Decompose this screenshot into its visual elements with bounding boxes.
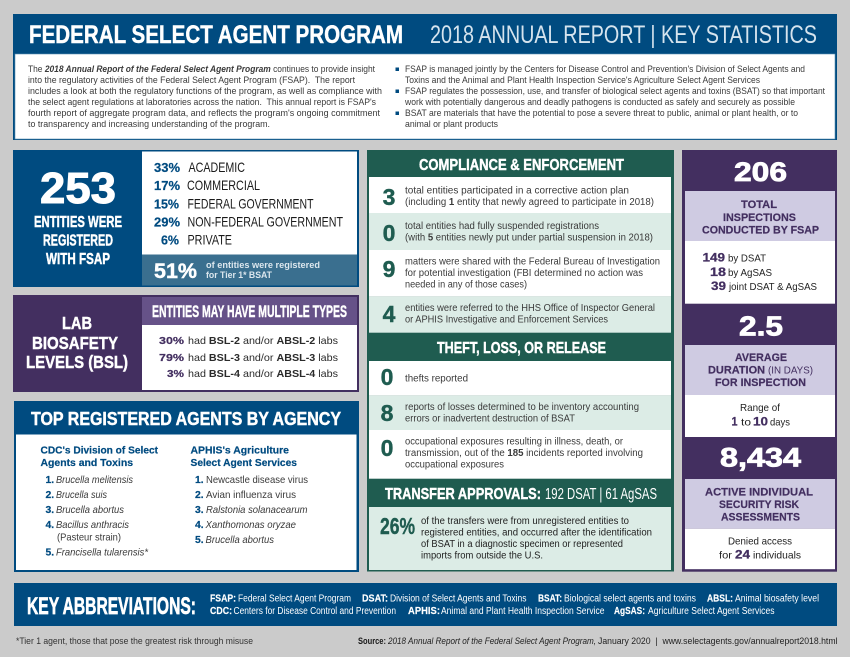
- tier 1 statistic: [154, 260, 320, 283]
- CDC list: CDC's Division of Select: [40, 446, 159, 456]
- assessments label: ASSESSMENTS: [721, 512, 800, 524]
- compliance row: suspended registrations: total entities had fully suspended registrations: [405, 221, 599, 232]
- inspections label: CONDUCTED BY FSAP: [702, 224, 819, 236]
- entity type breakdown: 6%: [161, 234, 179, 248]
- APHIS list: 1.: [195, 475, 204, 486]
- duration range: Range of: [740, 402, 780, 414]
- inspections label: TOTAL: [741, 199, 777, 211]
- bullet list: FSAP regulates the possession, use, and transfer of biological select agents and toxins (BSAT) so that important: [405, 86, 825, 96]
- abbreviations second row: CDC:: [210, 606, 232, 617]
- CDC list: 5.: [46, 548, 54, 558]
- panel: registered entities: [13, 150, 359, 287]
- abbreviations second row: Centers for Disease Control and Prevention: [234, 606, 396, 617]
- theft row: thefts: [369, 361, 671, 396]
- abbreviations first row: DSAT:: [362, 594, 388, 604]
- abbreviations first row: Biological select agents and toxins: [564, 594, 696, 604]
- abbreviations second row: Animal and Plant Health Inspection Service: [441, 606, 605, 617]
- duration range: 1: [732, 416, 738, 428]
- CDC list: Brucella melitensis: [56, 475, 133, 486]
- panel: inspections: [682, 150, 837, 572]
- tier 1 statistic: 51%: [154, 260, 197, 283]
- abbreviations heading: KEY ABBREVIATIONS:: [27, 593, 196, 620]
- theft row: losses: [369, 396, 671, 430]
- source line: [358, 636, 838, 647]
- compliance row: FBI matters: 9: [383, 256, 395, 282]
- biosafety heading: BIOSAFETY: [32, 333, 118, 353]
- CDC list: Brucella abortus: [56, 505, 124, 516]
- entities caption: [34, 214, 122, 268]
- denied access: for: [719, 550, 733, 562]
- entities caption: REGISTERED: [43, 232, 113, 250]
- APHIS list: Avian influenza virus: [206, 490, 296, 501]
- transfer approvals heading: TRANSFER APPROVALS:: [385, 486, 541, 503]
- compliance row: referrals: or APHIS Investigative and Enforcement Services: [405, 314, 608, 326]
- APHIS list: [190, 446, 308, 546]
- theft row: occupational exposures: occupational exposures: [405, 460, 504, 470]
- transfer statistic: of the transfers were from unregistered entities to: [421, 516, 629, 527]
- panel: compliance, theft and transfers: [367, 150, 674, 572]
- compliance row: corrective action: [369, 177, 671, 213]
- duration range: to: [741, 416, 751, 428]
- APHIS list: 4.: [195, 520, 204, 531]
- transfer statistic: 26%: [380, 513, 415, 539]
- APHIS list: Ralstonia solanacearum: [206, 505, 308, 516]
- CDC list: 1.: [46, 475, 54, 486]
- transfer approvals heading: 192 DSAT | 61 AgSAS: [545, 486, 657, 503]
- denied access: 24: [735, 550, 751, 562]
- CDC list: 2.: [46, 490, 54, 501]
- intro paragraph: fourth report of aggregate program data, and reflects the program's ongoing commitment: [28, 108, 380, 118]
- compliance row: FBI matters: matters were shared with the Federal Bureau of Investigation: [405, 256, 660, 268]
- biosafety level rows: 3%: [167, 368, 185, 380]
- entity type breakdown: NON-FEDERAL GOVERNMENT: [188, 214, 343, 230]
- theft row: losses: errors or inadvertent destruction of BSAT: [405, 414, 575, 424]
- abbreviations second row: APHIS:: [408, 606, 440, 617]
- intro paragraph: into the regulatory activities of the Federal Select Agent Program (FSAP). The report: [28, 75, 355, 85]
- biosafety heading: LAB: [62, 313, 92, 333]
- abbreviations first row: Division of Select Agents and Toxins: [390, 594, 526, 604]
- compliance row: FBI matters: needed in any of those cases): [405, 280, 527, 290]
- panel: top registered agents: [14, 401, 359, 572]
- intro paragraph: the select agent regulations at laboratories across the nation. This annual report is FSAP's: [28, 97, 376, 107]
- compliance row: referrals: entities were referred to the HHS Office of Inspector General: [405, 303, 655, 314]
- panel: key abbreviations: [14, 583, 837, 626]
- transfer statistic: of BSAT in a diagnostic specimen or represented: [421, 539, 623, 550]
- abbreviations second row: Agriculture Select Agent Services: [648, 606, 774, 617]
- inspections total: 206: [734, 157, 787, 187]
- inspections breakdown: 18: [710, 267, 727, 279]
- duration range: days: [770, 416, 790, 428]
- entity type breakdown: 17%: [154, 179, 180, 193]
- bullet list: work with potentially dangerous and deadly pathogens is conducted as safely and securely as possible: [404, 97, 795, 107]
- average duration: 2.5: [739, 310, 783, 342]
- transfer statistic: registered entities, and occurred after the identification: [421, 528, 652, 538]
- duration label: [685, 345, 835, 395]
- assessments label: ACTIVE INDIVIDUAL: [705, 486, 813, 498]
- entity type breakdown: 15%: [154, 198, 179, 212]
- biosafety level rows: 79%: [159, 352, 185, 364]
- APHIS list: Select Agent Services: [190, 458, 297, 469]
- APHIS list: 5.: [195, 535, 204, 546]
- entity type breakdown: PRIVATE: [188, 232, 232, 248]
- compliance row: FBI matters: for potential investigation (FBI determined no action was: [405, 268, 643, 279]
- duration label: AVERAGE: [735, 352, 787, 364]
- footnote: *Tier 1 agent, those that pose the greatest risk through misuse: [16, 636, 253, 647]
- panel: header: [13, 14, 837, 140]
- bullet list: Toxins and the Animal and Plant Health Inspection Service's Agriculture Select Agent Services: [405, 75, 760, 85]
- compliance row: corrective action: total entities participated in a corrective action plan: [405, 186, 629, 196]
- entity type breakdown: ACADEMIC: [188, 159, 245, 175]
- compliance row: corrective action: (including 1 entity that newly agreed to participate in 2018): [405, 197, 654, 208]
- bullet list: FSAP is managed jointly by the Centers for Disease Control and Prevention's Division of Select Agents and: [405, 64, 805, 74]
- theft row: losses: 8: [381, 400, 394, 426]
- theft heading: THEFT, LOSS, OR RELEASE: [437, 340, 606, 357]
- denied access: [685, 529, 835, 569]
- biosafety level rows: had BSL-4 and/or ABSL-4 labs: [188, 368, 338, 380]
- biosafety level rows: 30%: [159, 335, 185, 347]
- abbreviations first row: ABSL:: [707, 594, 733, 604]
- compliance row: corrective action: 3: [383, 184, 395, 210]
- compliance row: referrals: [369, 297, 671, 333]
- inspections breakdown: 39: [711, 281, 726, 293]
- panel: lab biosafety levels: [13, 295, 359, 392]
- inspections breakdown: by AgSAS: [728, 267, 772, 279]
- inspections breakdown: [685, 241, 835, 304]
- CDC list: Francisella tularensis*: [56, 548, 149, 558]
- duration label: (IN DAYS): [768, 364, 813, 376]
- big number 253: 253: [40, 164, 116, 213]
- entity type breakdown: [154, 159, 343, 248]
- multiple types heading: ENTITIES MAY HAVE MULTIPLE TYPES: [152, 303, 347, 321]
- APHIS list: Brucella abortus: [206, 535, 274, 546]
- theft row: occupational exposures: [369, 430, 671, 479]
- inspections label: INSPECTIONS: [723, 212, 796, 224]
- compliance row: FBI matters: [369, 250, 671, 297]
- CDC list: (Pasteur strain): [57, 532, 121, 544]
- biosafety heading: [26, 313, 128, 372]
- compliance row: suspended registrations: 0: [383, 220, 395, 246]
- APHIS list: 3.: [195, 505, 204, 516]
- tier 1 statistic: of entities were registered: [206, 260, 320, 270]
- agents heading: TOP REGISTERED AGENTS BY AGENCY: [31, 409, 341, 429]
- theft row: thefts: 0: [381, 364, 393, 390]
- entity type breakdown: FEDERAL GOVERNMENT: [188, 196, 314, 212]
- abbreviations first row: BSAT:: [538, 594, 562, 604]
- CDC list: Bacillus anthracis: [56, 520, 129, 531]
- abbreviations second row: [210, 606, 774, 617]
- entity type breakdown: 29%: [154, 216, 180, 230]
- source line: 2018 Annual Report of the Federal Select Agent Program,: [387, 636, 596, 647]
- duration label: DURATION: [708, 364, 765, 376]
- CDC list: Agents and Toxins: [40, 458, 133, 469]
- title: FEDERAL SELECT AGENT PROGRAM: [29, 21, 403, 49]
- tier 1 statistic: for Tier 1* BSAT: [206, 270, 273, 280]
- inspections label: [685, 191, 835, 241]
- biosafety heading: LEVELS (BSL): [26, 352, 128, 372]
- APHIS list: Newcastle disease virus: [206, 475, 308, 486]
- abbreviations second row: AgSAS:: [614, 606, 645, 617]
- theft row: occupational exposures: 0: [381, 435, 393, 461]
- theft row: thefts: thefts reported: [405, 374, 468, 384]
- biosafety level rows: [159, 335, 338, 380]
- CDC list: [40, 446, 159, 558]
- abbreviations first row: Animal biosafety level: [735, 594, 819, 604]
- compliance row: suspended registrations: [369, 213, 671, 250]
- theft row: losses: reports of losses determined to be inventory accounting: [405, 402, 639, 413]
- CDC list: 4.: [46, 520, 54, 531]
- APHIS list: APHIS's Agriculture: [190, 446, 289, 456]
- theft row: occupational exposures: occupational exposures resulting in illness, death, or: [405, 436, 624, 448]
- security risk assessments number: 8,434: [720, 442, 801, 472]
- inspections breakdown: by DSAT: [728, 252, 767, 264]
- duration range: 10: [753, 416, 768, 428]
- entity type breakdown: COMMERCIAL: [187, 177, 260, 193]
- duration label: FOR INSPECTION: [715, 377, 806, 389]
- bullet list: BSAT are materials that have the potential to pose a severe threat to public, animal or plant health, or to: [405, 108, 798, 118]
- biosafety level rows: had BSL-3 and/or ABSL-3 labs: [188, 352, 338, 364]
- assessments label: [685, 479, 835, 529]
- intro paragraph: The 2018 Annual Report of the Federal Select Agent Program continues to provide insight: [28, 64, 375, 74]
- compliance heading: COMPLIANCE & ENFORCEMENT: [419, 157, 624, 174]
- denied access: individuals: [753, 550, 801, 562]
- intro paragraph: to transparency and increasing understanding of the program.: [28, 119, 270, 129]
- CDC list: Brucella suis: [56, 490, 107, 501]
- source line: Source:: [358, 636, 386, 647]
- bullet list: animal or plant products: [405, 119, 498, 129]
- APHIS list: Xanthomonas oryzae: [205, 520, 296, 531]
- APHIS list: 2.: [195, 490, 204, 501]
- abbreviations first row: FSAP:: [210, 594, 236, 604]
- abbreviations first row: Federal Select Agent Program: [238, 594, 351, 604]
- compliance row: suspended registrations: (with 5 entities newly put under partial suspension in 2018): [405, 232, 653, 244]
- duration range: [685, 395, 835, 437]
- theft row: occupational exposures: transmission, out of the 185 incidents reported involving: [405, 448, 643, 459]
- inspections breakdown: 149: [702, 252, 725, 264]
- biosafety level rows: had BSL-2 and/or ABSL-2 labs: [188, 335, 338, 347]
- compliance row: referrals: 4: [383, 301, 396, 327]
- denied access: Denied access: [728, 536, 792, 548]
- inspections breakdown: joint DSAT & AgSAS: [728, 281, 817, 293]
- intro paragraph: [28, 64, 382, 129]
- intro paragraph: includes a look at both the regulatory functions of the program, as well as compliance with: [28, 86, 382, 96]
- entity type breakdown: 33%: [154, 161, 180, 175]
- entities caption: WITH FSAP: [46, 251, 110, 268]
- entities caption: ENTITIES WERE: [34, 214, 122, 231]
- assessments label: SECURITY RISK: [719, 499, 799, 511]
- CDC list: 3.: [46, 505, 54, 516]
- transfer statistic: [369, 507, 671, 570]
- bullet list: [396, 64, 825, 129]
- abbreviations first row: [210, 594, 819, 604]
- transfer statistic: imports from outside the U.S.: [421, 550, 543, 562]
